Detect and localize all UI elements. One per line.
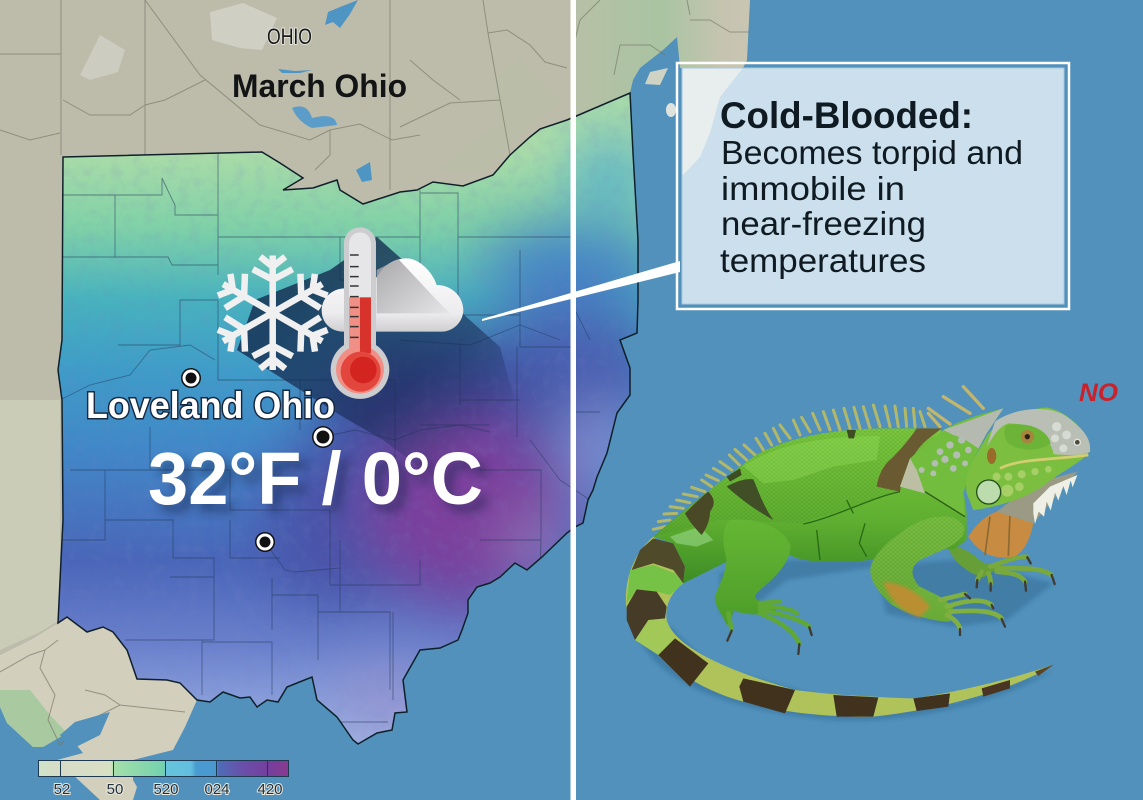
- jaw fringe and spikes: [997, 472, 1077, 524]
- ear: [987, 448, 996, 464]
- shadow of temperature text: 32°F / 0°C: [156, 445, 491, 528]
- front leg: [870, 516, 1005, 635]
- callout body text: temperatures: [720, 242, 926, 279]
- map: Ohio temperature field: [58, 94, 638, 743]
- dorsal spines: [653, 405, 925, 529]
- location marker: [255, 532, 275, 552]
- legend: temperature colour bar: 520: [153, 781, 179, 798]
- label: NO: NO: [1079, 379, 1119, 407]
- legend: temperature colour bar: 024: [204, 781, 230, 798]
- label: Loveland Ohio: Loveland Ohio: [86, 385, 335, 426]
- nostril: [1074, 439, 1080, 445]
- far front leg: [948, 546, 1055, 591]
- dewlap: [968, 510, 1033, 558]
- location marker: [312, 426, 334, 448]
- neck tubercles: [919, 436, 972, 476]
- subtympanic scale: [977, 480, 1001, 504]
- long shadows behind icons: [237, 237, 520, 490]
- ground shadow: [640, 560, 1053, 720]
- eye orbit: [1004, 424, 1051, 450]
- callout box: Cold-Blooded: [677, 63, 1069, 309]
- callout heading: Cold-Blooded:: [720, 95, 973, 136]
- dark body patches: [877, 428, 942, 492]
- legend: temperature colour bar: 50: [107, 781, 123, 798]
- callout pointer: [482, 261, 680, 321]
- temperature reading: 32°F / 0°C: [148, 437, 483, 520]
- callout body text: near-freezing: [721, 205, 926, 242]
- map: southern land mass: [0, 617, 197, 800]
- map: northern land mass: [0, 0, 750, 655]
- label: OHIO: OHIO: [267, 24, 312, 49]
- head: [966, 407, 1090, 510]
- jaw line: [1000, 455, 1088, 468]
- icon: cloud: [322, 258, 463, 332]
- callout body text: Becomes torpid and: [721, 134, 1023, 171]
- jaw scales: [993, 466, 1052, 497]
- rear leg: [715, 519, 812, 654]
- neck and shoulder: [900, 408, 1003, 517]
- legend: temperature colour bar: [38, 760, 288, 798]
- dewlap folds: [985, 513, 1010, 556]
- legend: temperature colour bar: 420: [257, 781, 283, 798]
- illustration: green iguana: [626, 387, 1090, 720]
- body: [653, 428, 967, 583]
- legend: temperature colour bar: 52: [54, 781, 70, 798]
- heading: March Ohio: March Ohio: [232, 68, 407, 104]
- map: county lines: [63, 152, 600, 722]
- head scales: [1051, 422, 1071, 452]
- icon: thermometer: [331, 227, 389, 399]
- tail: [626, 537, 1054, 717]
- callout body text: [720, 134, 1023, 279]
- back highlight: [743, 436, 880, 483]
- map: Ohio state border: [58, 93, 638, 744]
- vertical panel divider: [570, 0, 576, 800]
- icon: snowflake: [217, 259, 328, 367]
- callout body text: immobile in: [721, 170, 905, 207]
- eye: [1021, 430, 1034, 443]
- body folds: [803, 492, 900, 560]
- location marker: [181, 368, 201, 388]
